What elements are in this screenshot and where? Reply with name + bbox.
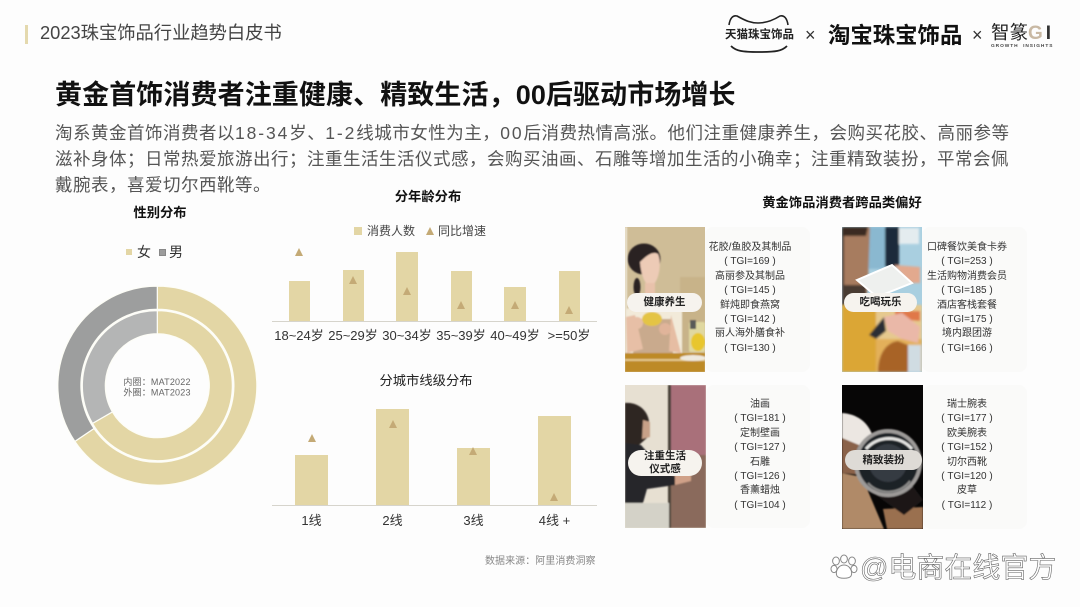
report name: 2023珠宝饰品行业趋势白皮书	[40, 22, 282, 43]
card: health	[625, 227, 791, 372]
donut centre note: 外圈：MAT2023	[123, 386, 191, 398]
legend: female male: 男	[169, 244, 183, 260]
intro paragraph	[55, 123, 1010, 195]
list: lifestyle TGI: 香薰蜡烛	[740, 485, 780, 496]
photo: wrist watch	[842, 385, 923, 529]
bars	[288, 281, 310, 321]
legend: consumers and growth: 同比增速	[438, 224, 486, 238]
list: lifestyle TGI: 定制壁画	[740, 428, 780, 439]
list: fine dress TGI: 皮草	[957, 485, 977, 496]
list: fine dress TGI: 欧美腕表	[947, 428, 987, 439]
multiply sign: ×	[972, 25, 983, 45]
heading: gender: 性别分布	[133, 205, 187, 220]
legend: consumers and growth: 消费人数	[367, 224, 415, 238]
panel: age distribution: >=50岁	[548, 328, 590, 343]
list: fine dress TGI	[941, 398, 993, 511]
list: dining TGI: ( TGI=253 )	[941, 256, 993, 267]
multiply sign: ×	[805, 25, 816, 45]
list: lifestyle TGI: 油画	[750, 399, 770, 410]
title: 黄金首饰消费者注重健康、精致生活，00后驱动市场增长	[55, 80, 736, 110]
label: lifestyle: 注重生活	[644, 450, 686, 462]
panel: age distribution: 40~49岁	[490, 328, 540, 343]
photo: woman at painting	[625, 385, 706, 528]
card: dining and leisure	[842, 227, 1007, 372]
list: dining TGI: 口碑餐饮美食卡券	[927, 242, 1007, 253]
label: lifestyle	[628, 450, 702, 476]
label: fine dress: 精致装扮	[862, 454, 904, 466]
list: health TGI: ( TGI=169 )	[724, 256, 776, 267]
axis	[272, 321, 597, 322]
legend: female male	[126, 244, 183, 260]
list: lifestyle TGI: ( TGI=127 )	[734, 442, 786, 453]
bars	[295, 455, 328, 505]
list: fine dress TGI: ( TGI=112 )	[942, 500, 992, 511]
list: fine dress TGI: ( TGI=152 )	[941, 442, 993, 453]
list: lifestyle TGI: 石雕	[750, 457, 770, 468]
panel: age distribution: 25~29岁	[328, 328, 378, 343]
heading: age: 分年龄分布	[395, 189, 461, 204]
list: health TGI: 高丽参及其制品	[715, 271, 785, 282]
list: dining TGI: ( TGI=166 )	[941, 343, 993, 354]
label: health: 健康养生	[644, 296, 686, 308]
label: lifestyle: 仪式感	[649, 463, 681, 475]
list: dining TGI: 境内跟团游	[942, 328, 992, 339]
panel: city tier distribution	[272, 373, 597, 528]
partner logos	[725, 15, 1053, 53]
panel: cross-category preferences	[625, 195, 1007, 529]
list: lifestyle TGI: ( TGI=104 )	[734, 500, 786, 511]
intro paragraph: 淘系黄金首饰消费者以18-34岁、1-2线城市女性为主，00后消费热情高涨。他们注重健康养生，会购买花胶、高丽参等	[55, 123, 1010, 143]
photo: hand with phone	[842, 227, 922, 372]
list: fine dress TGI: ( TGI=120 )	[941, 471, 993, 482]
label: dining: 吃喝玩乐	[860, 296, 902, 308]
donut chart	[58, 286, 256, 485]
icon: paw	[830, 554, 858, 579]
list: health TGI: 丽人海外膳食补	[715, 328, 785, 339]
axis	[272, 505, 597, 506]
card: fine dress	[842, 385, 993, 529]
panel: city tier distribution: 4线 +	[539, 513, 570, 528]
photo: woman with tea	[625, 227, 705, 372]
list: fine dress TGI: 切尔西靴	[947, 457, 987, 468]
label: dining	[844, 293, 917, 312]
list: health TGI: 鲜炖即食燕窝	[720, 300, 780, 311]
panel: age distribution	[272, 189, 597, 343]
intro paragraph: 滋补身体；日常热爱旅游出行；注重生活生活仪式感，会购买油画、石雕等增加生活的小确幸；注重精致装扮，平常会佩	[55, 149, 1009, 169]
donut centre note	[123, 376, 191, 398]
list: dining TGI: 酒店客栈套餐	[937, 300, 997, 311]
panel: age distribution: 35~39岁	[436, 328, 486, 343]
panel: city tier distribution: 2线	[382, 513, 403, 528]
tier labels: 1线	[301, 513, 322, 528]
list: health TGI: 花胶/鱼胶及其制品	[709, 242, 791, 253]
data source: 数据来源：阿里消费洞察	[485, 556, 596, 567]
panel: city tier distribution: 3线	[463, 513, 484, 528]
logo: taobao jewellery text: 淘宝珠宝饰品	[828, 23, 962, 48]
legend: female male: 女	[137, 244, 151, 260]
growth markers	[308, 434, 316, 442]
heading: city tier: 分城市线级分布	[379, 373, 473, 388]
logo: tmall cat outline	[728, 15, 789, 53]
list: lifestyle TGI	[734, 398, 786, 511]
watermark text: @电商在线官方	[860, 552, 1056, 583]
list: dining TGI: ( TGI=175 )	[941, 314, 993, 325]
heading: preferences: 黄金饰品消费者跨品类偏好	[762, 195, 922, 210]
card: lifestyle	[625, 385, 786, 528]
list: dining TGI: 生活购物消费会员	[927, 271, 1007, 282]
label: health	[627, 293, 702, 312]
label: fine dress	[845, 450, 922, 470]
list: health TGI: ( TGI=142 )	[724, 314, 776, 325]
list: lifestyle TGI: ( TGI=126 )	[734, 471, 786, 482]
growth markers	[295, 248, 303, 256]
list: lifestyle TGI: ( TGI=181 )	[734, 413, 786, 424]
age labels: 18~24岁	[274, 328, 324, 343]
donut centre note: 内圈：MAT2022	[123, 376, 191, 387]
list: fine dress TGI: 瑞士腕表	[947, 399, 987, 410]
list: dining TGI: ( TGI=185 )	[941, 285, 993, 296]
panel: gender distribution	[58, 205, 256, 485]
intro paragraph: 戴腕表，喜爱切尔西靴等。	[55, 175, 271, 195]
logo tagline: GROWTH INSIGHTS	[991, 44, 1053, 49]
list: health TGI: ( TGI=130 )	[724, 343, 776, 354]
logo: tmall jewellery text: 天猫珠宝饰品	[725, 29, 794, 41]
legend: consumers and growth	[354, 224, 486, 238]
list: health TGI: ( TGI=145 )	[724, 285, 776, 296]
header accent bar	[25, 25, 28, 44]
list: fine dress TGI: ( TGI=177 )	[941, 413, 993, 424]
panel: age distribution: 30~34岁	[382, 328, 432, 343]
list: dining TGI	[927, 241, 1007, 354]
logo: zhizhuan GI: 智篆GI	[991, 22, 1051, 44]
watermark	[830, 552, 1056, 583]
list: health TGI	[709, 241, 791, 354]
